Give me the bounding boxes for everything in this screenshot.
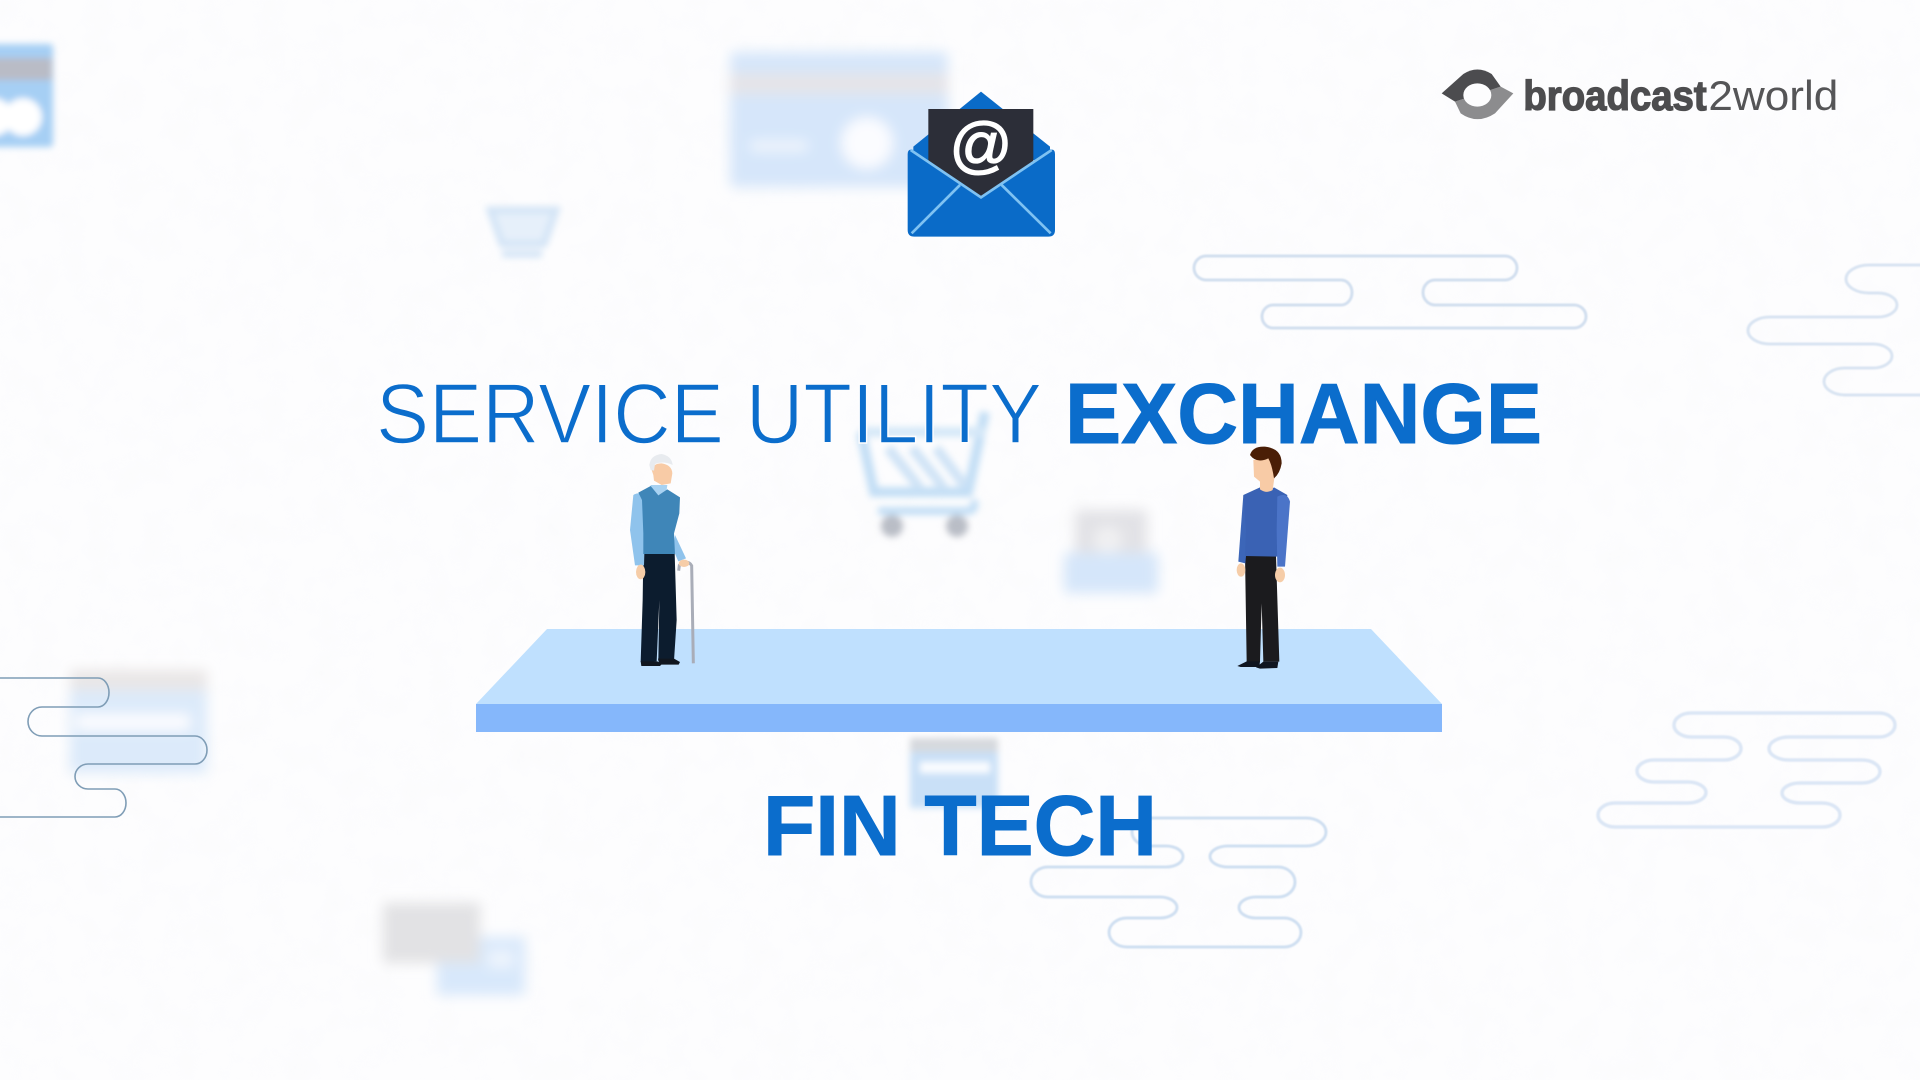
blurred card: top center	[730, 52, 948, 187]
blurred card: left	[70, 670, 207, 773]
icon: open envelope with at sign	[908, 92, 1055, 237]
figure: older man with cane	[630, 454, 693, 666]
icon: open envelope with at sign: @	[950, 111, 1012, 180]
title: service utility exchange	[376, 367, 1542, 462]
blurred card: top left edge	[0, 44, 53, 147]
cloud line: right edge	[1748, 265, 1920, 395]
title bold segment: EXCHANGE	[1065, 367, 1542, 462]
blurred small cart	[490, 210, 556, 254]
cloud line: top right	[1194, 256, 1586, 328]
heading: fin tech: FIN TECH	[763, 779, 1157, 874]
cloud line: bottom right	[1598, 713, 1895, 827]
cloud line: bottom center	[1031, 818, 1326, 947]
title light segment: SERVICE UTILITY	[376, 367, 1042, 462]
logo wordmark: 2world	[1708, 72, 1838, 119]
logo mark: eye	[1442, 69, 1513, 119]
blurred envelope	[1064, 510, 1158, 593]
blurred card pair: bottom left	[383, 903, 525, 995]
logo wordmark: broadcast	[1523, 72, 1707, 119]
figure: younger man	[1237, 447, 1290, 669]
blurred shopping cart	[861, 412, 985, 537]
cloud line: left	[0, 678, 207, 817]
platform	[476, 629, 1442, 732]
blurred card: below platform	[910, 738, 998, 808]
logo: broadcast2world	[1442, 69, 1838, 119]
